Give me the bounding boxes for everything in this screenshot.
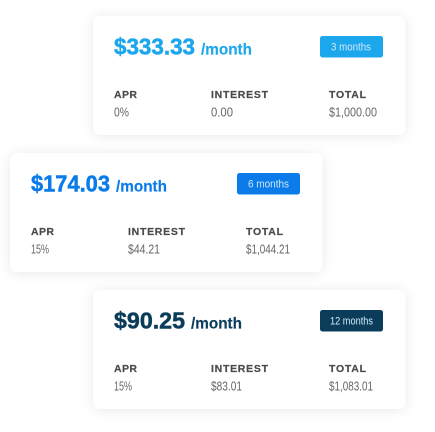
interest column: $83.01 — [211, 380, 242, 394]
APR column: 0% — [114, 106, 129, 120]
monthly price: $90.25 — [114, 308, 185, 334]
total column: $1,083.01 — [329, 380, 373, 394]
term badge: 6 months — [248, 178, 289, 190]
total column: TOTAL — [246, 226, 284, 238]
APR column — [114, 89, 137, 120]
interest column: INTEREST — [211, 89, 269, 101]
panel: 3 months plan — [93, 16, 406, 135]
interest column: 0.00 — [211, 106, 233, 120]
card background — [10, 153, 322, 272]
interest column: INTEREST — [211, 363, 269, 375]
per month label: /month — [191, 316, 242, 332]
interest column: $44.21 — [128, 242, 160, 256]
APR column: APR — [114, 363, 137, 375]
interest column — [128, 226, 186, 256]
interest column: INTEREST — [128, 226, 186, 238]
term badge — [320, 36, 383, 58]
total column — [329, 89, 377, 120]
card background — [93, 290, 406, 409]
total column — [329, 363, 373, 394]
monthly price: $333.33 — [114, 34, 195, 60]
per month label: /month — [116, 178, 167, 196]
monthly price: $174.03 — [31, 170, 110, 196]
APR column: 15% — [114, 380, 132, 394]
card background — [93, 16, 406, 135]
APR column: 15% — [31, 242, 49, 256]
APR column — [31, 226, 54, 256]
APR column: APR — [31, 226, 54, 238]
panel: 6 months plan — [10, 153, 322, 272]
per month label: /month — [201, 42, 252, 58]
total column: TOTAL — [329, 363, 367, 375]
panel: 12 months plan — [93, 290, 406, 409]
interest column — [211, 89, 269, 120]
interest column — [211, 363, 269, 394]
total column: $1,044.21 — [246, 242, 290, 256]
total column: TOTAL — [329, 89, 367, 101]
term badge — [320, 310, 383, 332]
term badge: 3 months — [331, 42, 371, 54]
total column: $1,000.00 — [329, 106, 377, 120]
term badge — [237, 173, 300, 194]
APR column — [114, 363, 137, 394]
total column — [246, 226, 290, 256]
term badge: 12 months — [330, 316, 373, 328]
APR column: APR — [114, 89, 137, 101]
